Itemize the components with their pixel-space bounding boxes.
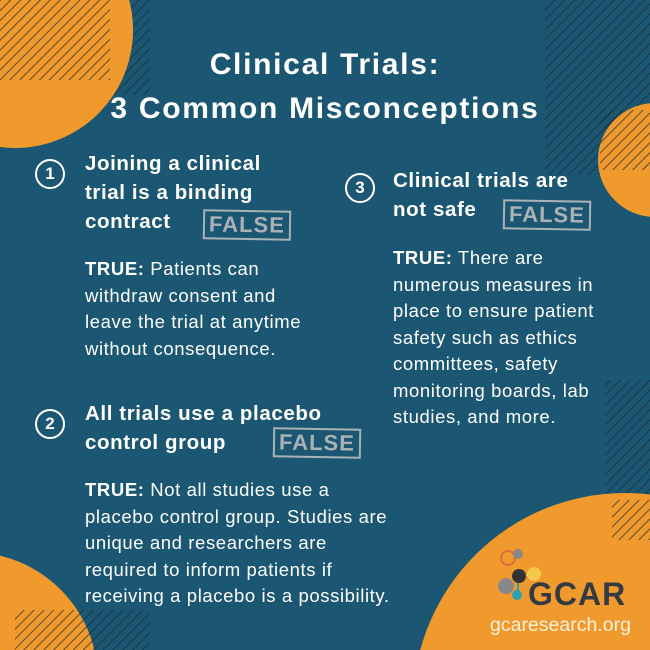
body 3 bbox=[393, 247, 594, 427]
body 1 bbox=[85, 258, 301, 359]
logo icon bbox=[498, 549, 541, 600]
logo text: GCAR bbox=[528, 576, 626, 612]
false stamp 2: FALSE bbox=[279, 429, 355, 456]
number 3 bbox=[345, 173, 375, 203]
heading 1: Joining a clinical bbox=[85, 152, 261, 175]
heading 3 bbox=[393, 169, 568, 221]
body 2: TRUE: Not all studies use a bbox=[85, 479, 329, 500]
heading 2 bbox=[85, 402, 322, 454]
body 3: monitoring boards, lab bbox=[393, 380, 589, 400]
body 3: numerous measures in bbox=[393, 274, 593, 294]
heading 3: not safe bbox=[393, 198, 476, 221]
body 3: committees, safety bbox=[393, 353, 558, 374]
title bbox=[110, 48, 540, 125]
heading 1: contract bbox=[85, 210, 171, 233]
body 2: receiving a placebo is a possibility. bbox=[85, 585, 390, 606]
body 1: leave the trial at anytime bbox=[85, 311, 301, 332]
title: 3 Common Misconceptions bbox=[110, 92, 540, 125]
website: gcaresearch.org bbox=[490, 614, 631, 636]
item 2 bbox=[35, 402, 390, 606]
body 1: without consequence. bbox=[85, 338, 276, 358]
heading 1 bbox=[85, 152, 261, 233]
item 3 bbox=[345, 169, 594, 427]
heading 2: control group bbox=[85, 431, 226, 454]
body 3: place to ensure patient bbox=[393, 300, 594, 321]
body 3: TRUE: There are bbox=[393, 247, 544, 268]
number 3: 3 bbox=[355, 178, 365, 197]
body 3: studies, and more. bbox=[393, 406, 556, 427]
body 2: required to inform patients if bbox=[85, 558, 332, 580]
heading 1: trial is a binding bbox=[85, 181, 253, 204]
body 3: safety such as ethics bbox=[393, 326, 577, 348]
false stamp 1: FALSE bbox=[209, 211, 285, 238]
item 1 bbox=[35, 152, 301, 359]
number 1 bbox=[35, 159, 65, 189]
title: Clinical Trials: bbox=[210, 48, 440, 81]
heading 3: Clinical trials are bbox=[393, 169, 568, 192]
heading 2: All trials use a placebo bbox=[85, 402, 322, 425]
number 2 bbox=[35, 409, 65, 439]
body 2: placebo control group. Studies are bbox=[85, 506, 387, 526]
body 1: TRUE: Patients can bbox=[85, 258, 259, 279]
body 2 bbox=[85, 479, 390, 606]
false stamp 3: FALSE bbox=[509, 201, 585, 228]
number 1: 1 bbox=[45, 164, 55, 183]
number 2: 2 bbox=[45, 414, 55, 433]
body 1: withdraw consent and bbox=[85, 284, 276, 306]
body 2: unique and researchers are bbox=[85, 532, 327, 553]
logo: GCAR bbox=[490, 549, 631, 636]
